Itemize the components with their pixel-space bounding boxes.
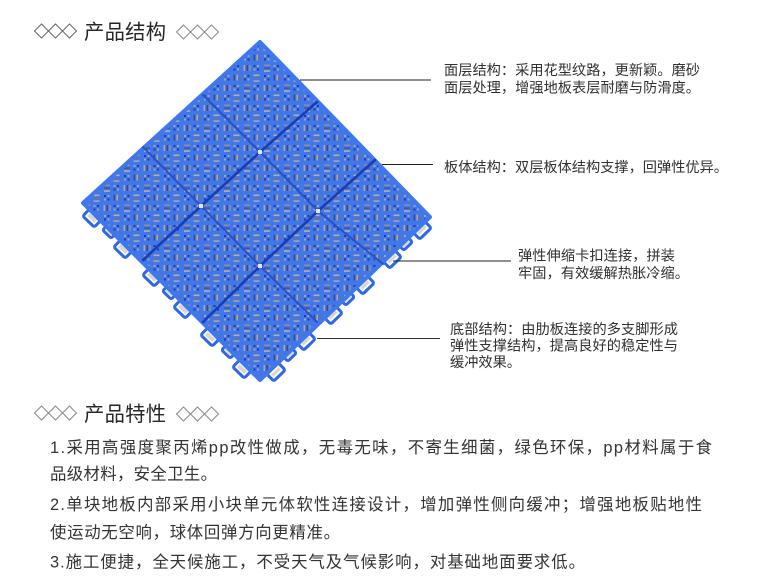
feature 2: 2.单块地板内部采用小块单元体软性连接设计，增加弹性侧向缓冲；增强地板贴地性 xyxy=(50,496,702,514)
icon: right diamonds xyxy=(176,407,218,421)
icon: left diamonds xyxy=(34,406,76,420)
callout: surface structure: 面层结构：采用花型纹路，更新颖。磨砂 xyxy=(444,63,700,79)
divider lines between modules xyxy=(143,95,383,322)
product image: blue interlocking floor tile xyxy=(83,42,431,381)
feature 1 xyxy=(50,439,712,484)
tile surface xyxy=(83,42,430,380)
callout: bottom structure: 底部结构：由肋板连接的多支脚形成 xyxy=(450,321,678,338)
feature 3: 3.施工便捷，全天候施工，不受天气及气候影响，对基础地面要求低。 xyxy=(50,554,585,572)
feature 2: 使运动无空响，球体回弹方向更精准。 xyxy=(50,524,340,542)
callout: board structure: 板体结构：双层板体结构支撑，回弹性优异。 xyxy=(444,160,728,176)
icon: right diamonds xyxy=(176,25,218,39)
heading text: 产品特性 xyxy=(84,403,166,426)
callout: surface structure xyxy=(300,63,700,96)
feature list xyxy=(50,439,712,572)
heading text: 产品结构 xyxy=(84,21,166,44)
heading: product features xyxy=(34,403,218,426)
callout: elastic clip connection: 弹性伸缩卡扣连接，拼装 xyxy=(518,248,675,264)
icon: left diamonds xyxy=(34,24,76,38)
junction nodes xyxy=(199,150,320,268)
callout: elastic clip connection xyxy=(393,248,689,282)
callout: surface structure: 面层处理，增强地板表层耐磨与防滑度。 xyxy=(444,80,700,96)
connector tabs: lower-left edge xyxy=(83,209,251,378)
callout: elastic clip connection: 牢固，有效缓解热胀冷缩。 xyxy=(518,266,689,282)
callout: bottom structure xyxy=(317,321,678,371)
feature 2 xyxy=(50,496,702,542)
heading: product structure xyxy=(34,21,218,44)
feature 1: 1.采用高强度聚丙烯pp改性做成，无毒无味，不寄生细菌，绿色环保，pp材料属于食 xyxy=(50,439,712,457)
callout: bottom structure: 缓冲效果。 xyxy=(450,355,521,371)
callout: bottom structure: 弹性支撑结构，提高良好的稳定性与 xyxy=(450,338,678,354)
connector tabs: lower-right edge xyxy=(267,221,431,381)
feature 1: 品级材料，安全卫生。 xyxy=(50,466,217,484)
